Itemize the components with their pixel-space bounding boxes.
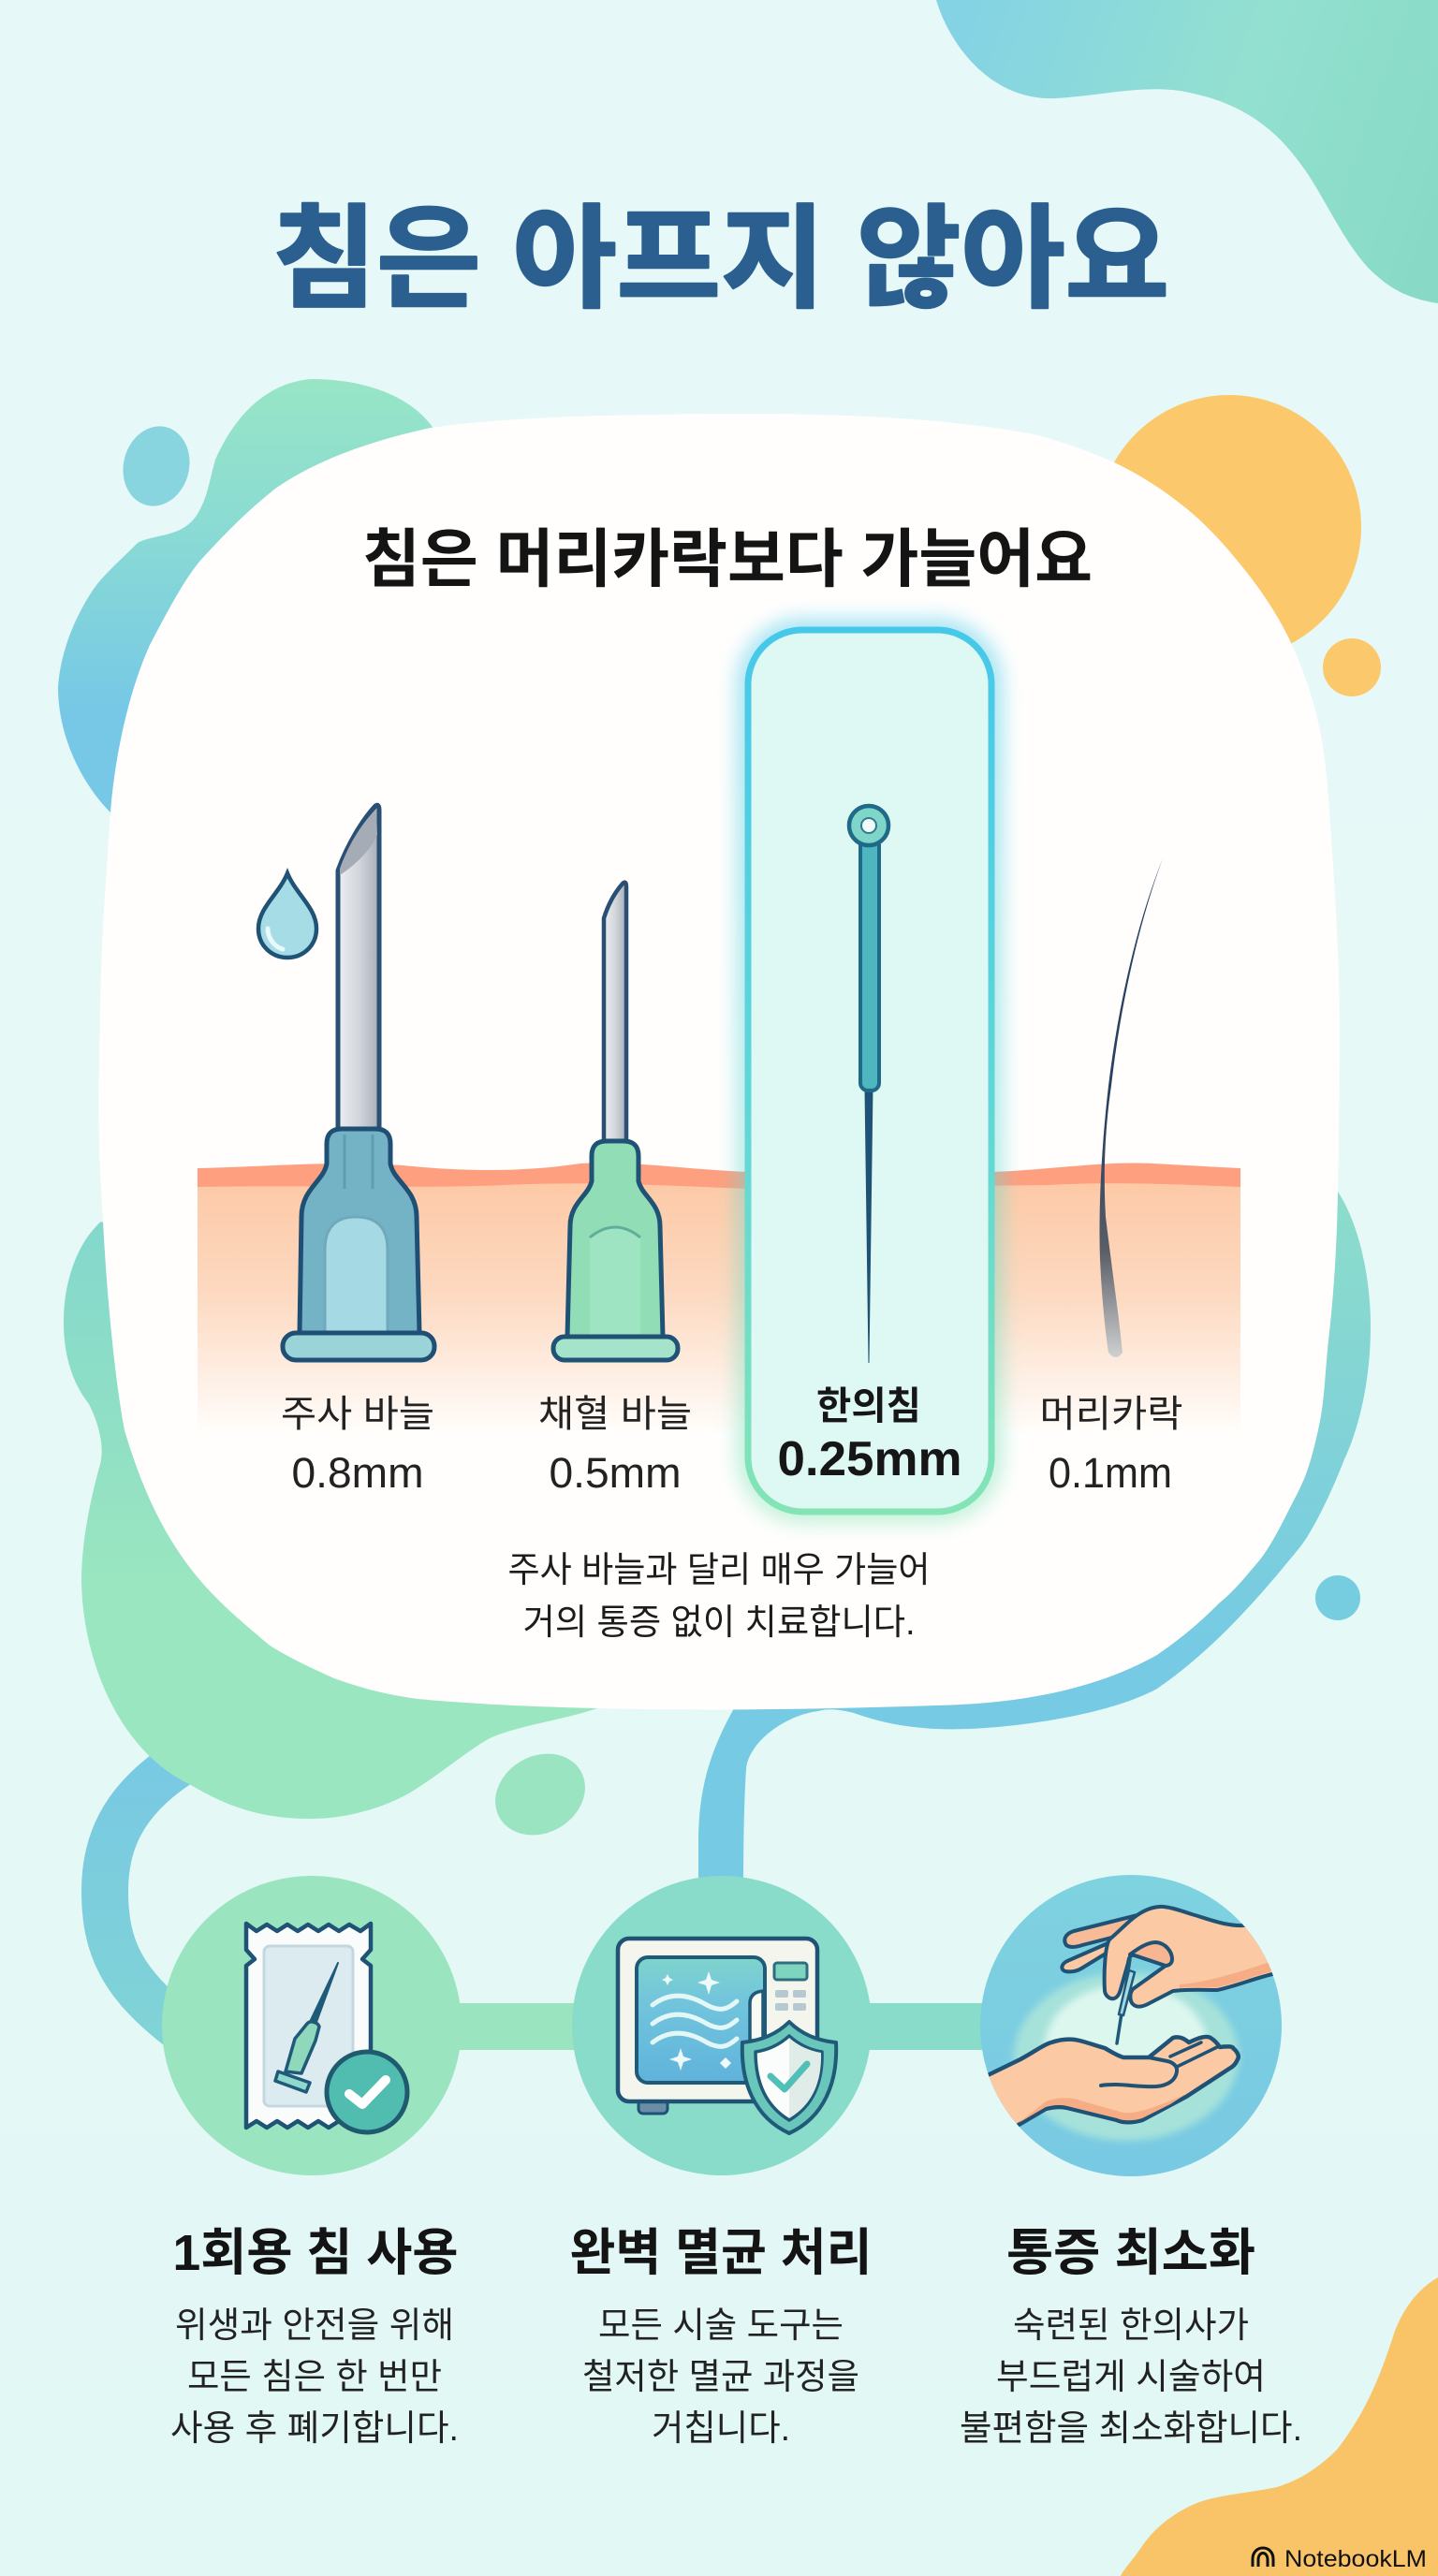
label: injection needle: 주사 바늘: [281, 1394, 434, 1435]
blob: top right: [936, 0, 1438, 303]
connector: green band: [449, 2003, 585, 2050]
blob: upper left: [58, 379, 440, 812]
label: blood draw needle: 0.5mm: [549, 1449, 682, 1497]
blob: small blue circle right: [1315, 1575, 1360, 1620]
icon: hair strand: [1099, 858, 1163, 1357]
column: sterilization text: [569, 2225, 873, 2449]
title: 침은 아프지 않아요: [272, 197, 1169, 322]
label: injection needle: 0.8mm: [292, 1449, 423, 1497]
connector: teal band: [861, 2003, 992, 2050]
label: acupuncture needle size: 0.25mm: [777, 1432, 962, 1486]
caption: [507, 1551, 931, 1643]
icon: blood draw needle: [553, 883, 678, 1360]
blob: small orange circle: [1323, 638, 1381, 696]
panel: acupuncture highlight column: [748, 630, 991, 1512]
label: blood draw needle: [538, 1394, 692, 1497]
icon: autoclave: [618, 1939, 836, 2133]
watermark: NotebookLM: NotebookLM: [1284, 2546, 1427, 2572]
label: blood draw needle: 채혈 바늘: [538, 1394, 692, 1435]
body: 사용 후 폐기합니다.: [170, 2409, 459, 2449]
body: [582, 2306, 859, 2449]
label: acupuncture needle name: 한의침: [816, 1384, 921, 1427]
blob: small green ellipse: [480, 1737, 600, 1852]
subtitle: 침은 머리카락보다 가늘어요: [362, 524, 1093, 595]
circle: disposable needle: [162, 1876, 462, 2175]
body: 모든 시술 도구는: [598, 2306, 844, 2346]
label: hair: 0.1mm: [1049, 1449, 1172, 1497]
body: 불편함을 최소화합니다.: [960, 2409, 1302, 2449]
body: 거칩니다.: [652, 2409, 790, 2449]
panel: main white card: [98, 414, 1340, 1709]
icon: water drop: [258, 873, 316, 958]
body: 숙련된 한의사가: [1013, 2306, 1249, 2346]
blob: orange upper right: [1097, 395, 1361, 659]
icon: acupuncture needle: [849, 806, 888, 1363]
icon: shield: [742, 2022, 836, 2133]
label: hair: 머리카락: [1039, 1394, 1183, 1435]
icon: hands with needle: [988, 1904, 1273, 2127]
line: left arc connector: [105, 1764, 178, 2027]
body: 철저한 멸균 과정을: [582, 2358, 859, 2397]
icon: injection needle: [283, 805, 434, 1360]
blob: small ellipse upper left: [115, 419, 198, 513]
label: injection needle: [281, 1394, 434, 1497]
blob: lower left green: [64, 1222, 597, 1819]
caption: 주사 바늘과 달리 매우 가늘어: [507, 1551, 931, 1590]
icon: needle pouch: [246, 1924, 407, 2132]
blob: lower right band and connector: [698, 1192, 1371, 1900]
skin layer illustration: [198, 1163, 1240, 1432]
caption: 거의 통증 없이 치료합니다.: [522, 1603, 916, 1643]
body: [170, 2306, 459, 2449]
circle: minimal pain: [974, 1875, 1301, 2176]
heading: 완벽 멸균 처리: [569, 2225, 873, 2281]
column: disposable needle text: [170, 2225, 459, 2449]
column: minimal pain text: [960, 2225, 1302, 2449]
heading: 1회용 침 사용: [172, 2225, 459, 2281]
body: [960, 2306, 1302, 2449]
body: 부드럽게 시술하여: [996, 2358, 1266, 2397]
heading: 통증 최소화: [1006, 2225, 1255, 2281]
blob: orange bottom right: [1121, 2277, 1438, 2576]
circle: sterilization: [572, 1876, 872, 2175]
body: 위생과 안전을 위해: [175, 2306, 454, 2346]
label: hair: [1039, 1394, 1183, 1497]
body: 모든 침은 한 번만: [187, 2358, 442, 2397]
